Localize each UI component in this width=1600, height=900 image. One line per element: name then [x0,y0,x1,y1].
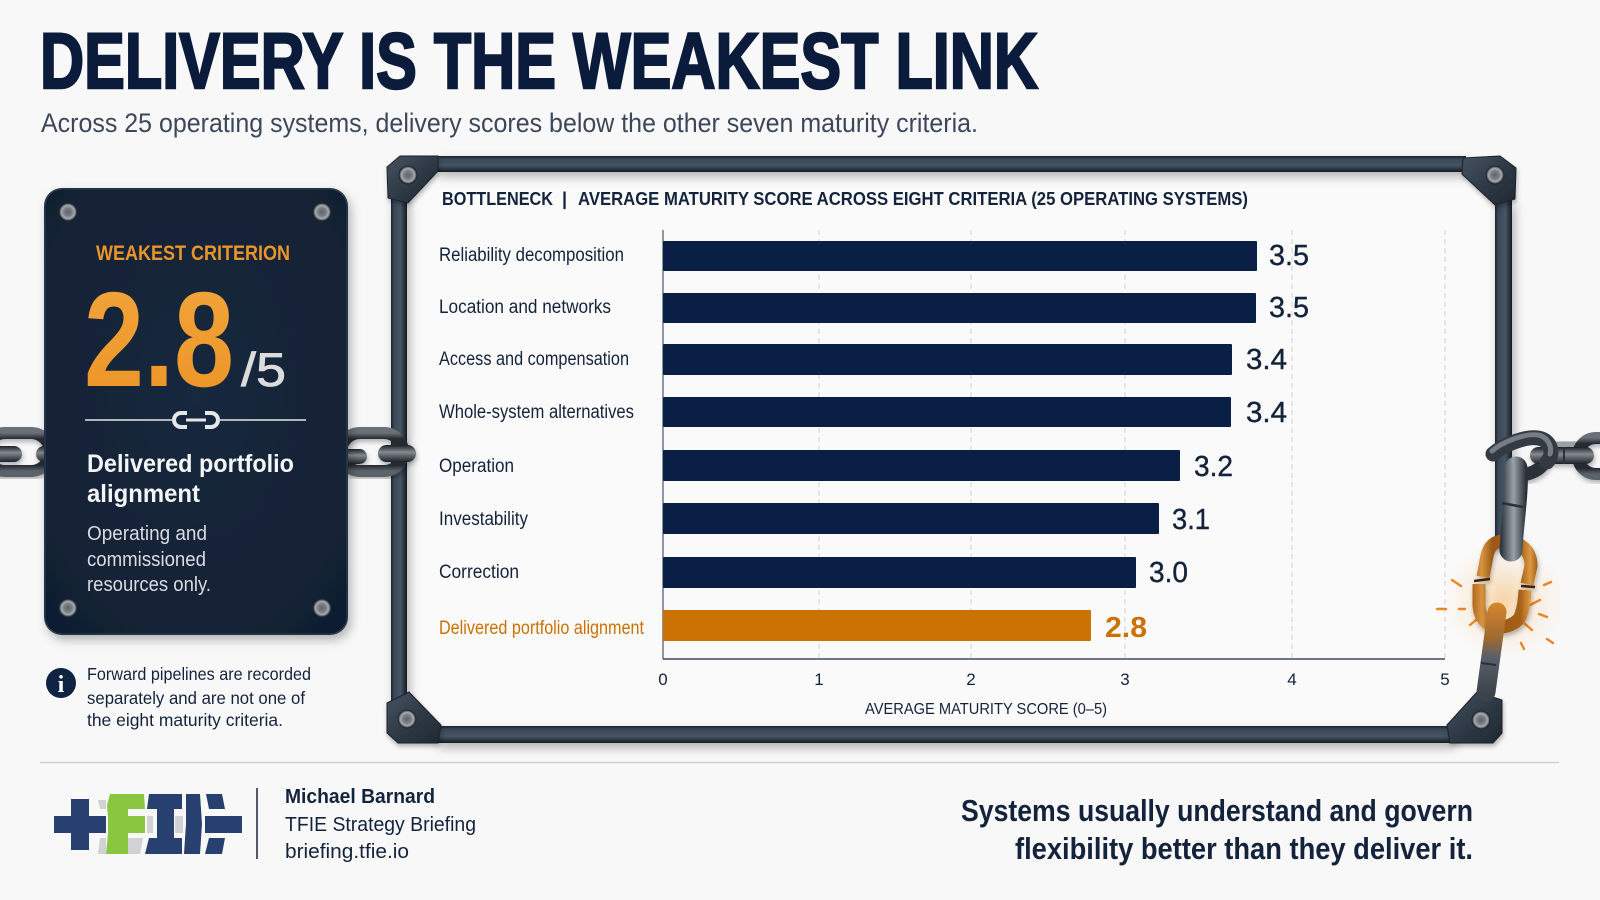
bar: location and networks: 3.5 [1269,292,1309,324]
card heading: Delivered portfolio [87,450,294,478]
icon: info: i [58,672,65,698]
note text: separately and are not one of [87,688,305,708]
card label: WEAKEST CRITERION [96,242,290,265]
out of five: /5 [241,343,286,396]
note text: the eight maturity criteria. [87,710,283,730]
axis tick labels: 2 [966,670,976,689]
bar: investability: 3.1 [1172,504,1210,536]
callout: pipeline note [46,664,311,730]
card note: Operating and [87,523,207,545]
card heading: alignment [87,480,201,508]
closing statement: flexibility better than they deliver it. [1015,831,1473,866]
bar: reliability decomposition [439,240,1309,272]
axis tick labels [658,670,1450,689]
chart heading: | [562,189,567,209]
chart heading: AVERAGE MATURITY SCORE ACROSS EIGHT CRITERIA (25 OPERATING SYSTEMS) [578,189,1248,209]
logo: TFIE [54,794,242,854]
chain: links running off the page [1510,438,1600,476]
steel link [1511,468,1516,550]
sparks [1437,580,1553,649]
chain: left of card [0,433,56,471]
card note: commissioned [87,549,206,571]
bar: location and networks: Location and networks [439,297,611,318]
frame corners [387,156,1516,743]
bar: location and networks [439,292,1309,324]
panel: chart frame [387,156,1516,743]
bar: investability: Investability [439,509,528,530]
subtitle: Across 25 operating systems, delivery scores below the other seven maturity criteria. [41,108,978,138]
chart heading: BOTTLENECK [442,189,553,209]
bar: delivered portfolio alignment: Delivered portfolio alignment [439,618,645,639]
chain: card to chart frame [341,433,416,471]
logo divider [256,788,258,859]
bar: correction: 3.0 [1149,557,1188,589]
icon: info [46,668,76,698]
footer divider [40,762,1559,764]
bar: access and compensation: Access and compensation [439,349,629,370]
card note: resources only. [87,574,211,596]
author block: briefing.tfie.io [285,841,409,863]
axis tick labels: 4 [1287,670,1297,689]
tilted top link [1492,435,1551,462]
bar: investability [439,503,1210,536]
icon: link divider [85,413,306,427]
axis tick labels: 1 [814,670,824,689]
copper link [1474,541,1535,627]
bar: delivered portfolio alignment: 2.8 [1105,612,1147,644]
axis tick labels: 5 [1440,670,1450,689]
axis tick labels: 0 [658,670,668,689]
bar: delivered portfolio alignment [439,610,1147,644]
note text: Forward pipelines are recorded [87,664,311,684]
author block [285,786,476,863]
bar: whole-system alternatives [439,397,1287,429]
bar: whole-system alternatives: 3.4 [1246,397,1287,429]
bar: whole-system alternatives: Whole-system alternatives [439,402,634,423]
big number: 2.8 [84,264,234,415]
axis title: AVERAGE MATURITY SCORE (0–5) [865,701,1107,718]
icon: breaking chain on the right [1437,435,1600,692]
spark glow [1443,540,1563,660]
closing statement: Systems usually understand and govern [961,793,1473,828]
bar: operation [439,450,1233,483]
bar: reliability decomposition: Reliability decomposition [439,245,624,266]
bar: operation: 3.2 [1194,451,1233,483]
bar chart [439,230,1450,718]
bar: reliability decomposition: 3.5 [1269,240,1309,272]
title: DELIVERY IS THE WEAKEST LINK [40,16,1038,105]
axis tick labels: 3 [1120,670,1130,689]
bar: access and compensation [439,344,1287,376]
bar: access and compensation: 3.4 [1246,344,1287,376]
panel: weakest criterion card [44,188,348,635]
author block: Michael Barnard [285,786,435,808]
icon: frame bolts [398,166,1504,729]
icon: card bolts [59,203,331,617]
bar: operation: Operation [439,456,514,477]
bar: correction: Correction [439,562,519,583]
lower link [1486,612,1497,692]
bar: correction [439,557,1188,589]
author block: TFIE Strategy Briefing [285,814,476,836]
